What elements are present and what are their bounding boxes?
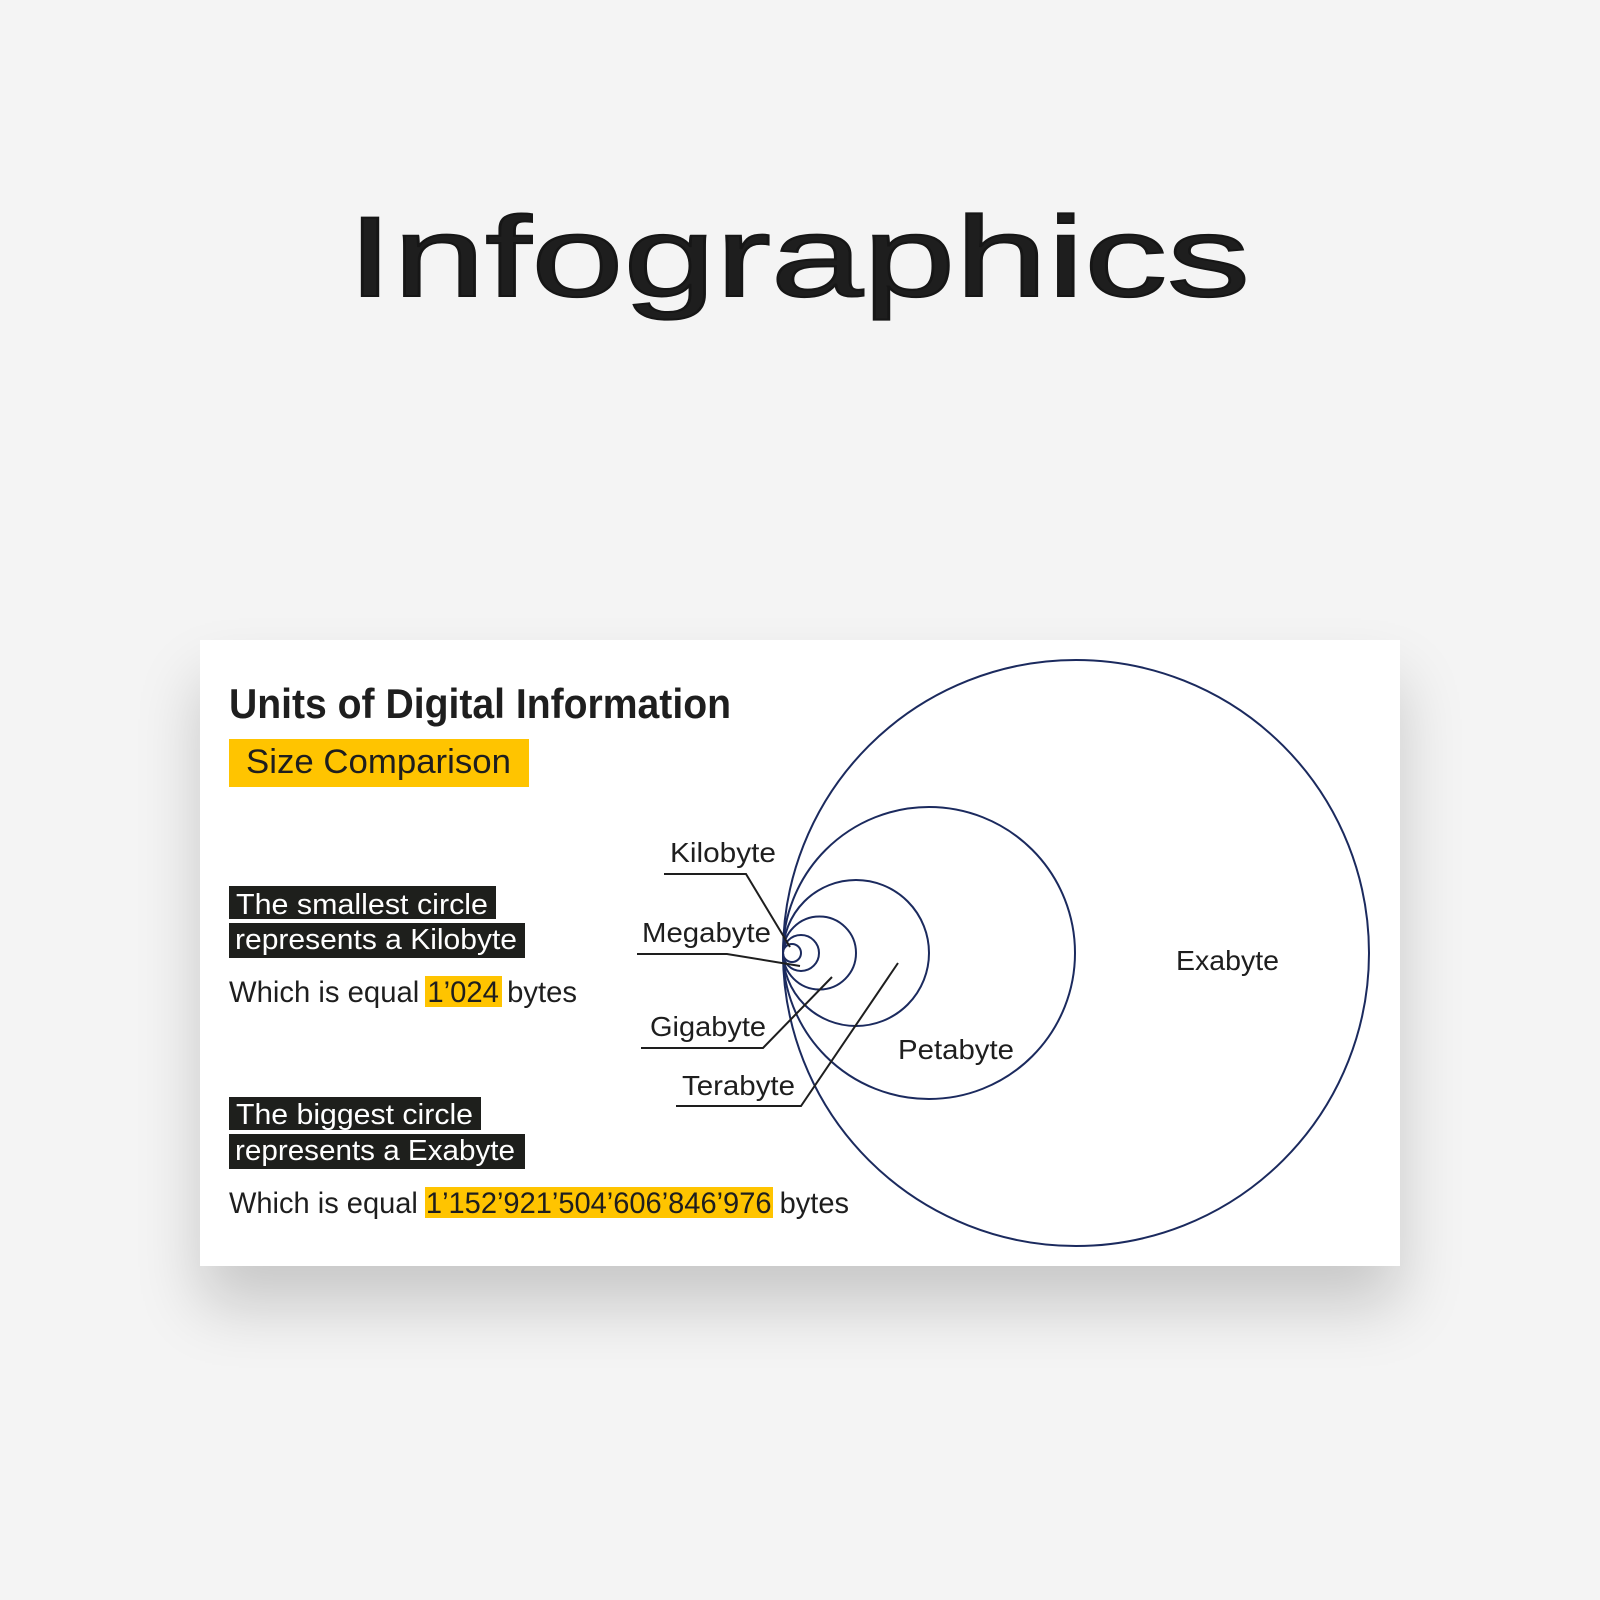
chart labels: Kilobyte [670,837,776,868]
text block: biggest circle [229,1097,849,1220]
chart labels [642,837,1279,1101]
chart labels: Terabyte [682,1070,795,1101]
text block: biggest circle: Which is equal 1’152’921’504’606’846’976 bytes [229,1187,849,1220]
title: Infographics [347,194,1250,321]
text block: biggest circle: represents a Exabyte [235,1135,515,1167]
text block: smallest circle: Which is equal 1’024 bytes [229,976,577,1009]
text block: smallest circle: The smallest circle [236,889,488,921]
panel: card [200,640,1400,1266]
chart labels: Exabyte [1176,945,1279,976]
subheading: size comparison [229,739,529,787]
subheading: size comparison: Size Comparison [246,743,511,781]
text block: smallest circle: represents a Kilobyte [235,924,517,956]
chart: nested circles [783,660,1369,1246]
text block: smallest circle [229,886,577,1009]
chart labels: Petabyte [898,1034,1014,1065]
callout lines [637,874,898,1106]
chart labels: Gigabyte [650,1011,766,1042]
chart labels: Megabyte [642,917,771,948]
heading: units: Units of Digital Information [229,680,731,727]
text block: biggest circle: The biggest circle [236,1099,473,1131]
